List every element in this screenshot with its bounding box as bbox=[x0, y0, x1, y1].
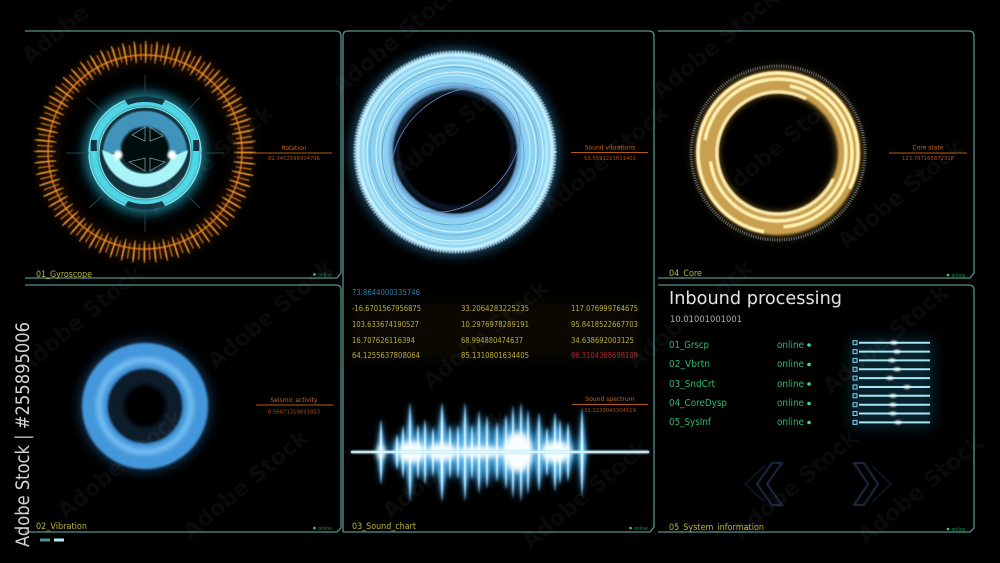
data table: 103.633674190527 bbox=[352, 320, 419, 329]
data table: 34.638692003125 bbox=[571, 336, 634, 345]
label: 03_Sound_chart: 03_Sound_chart bbox=[352, 522, 416, 532]
watermark: Adobe Stock bbox=[388, 65, 524, 185]
data table: -16.6701567956875 bbox=[352, 304, 421, 313]
status: online bbox=[313, 526, 332, 532]
watermark: Adobe Stock bbox=[378, 405, 514, 525]
callout: seismic activity: 0.56871319691853 bbox=[268, 410, 320, 416]
panel: vibration bbox=[36, 356, 333, 532]
data table: 64.1255637808064 bbox=[352, 351, 420, 360]
watermark: Adobe Stock bbox=[623, 255, 759, 375]
status list: online bbox=[777, 379, 804, 390]
watermark: Adobe Stock bbox=[538, 100, 674, 220]
icon: blue vibration ring bbox=[95, 356, 195, 456]
watermark: Adobe Stock bbox=[713, 85, 849, 205]
status list: 03_SndCrt bbox=[669, 379, 715, 390]
callout: sound spectrum: Sound spectrum bbox=[585, 396, 635, 403]
panel: gyroscope bbox=[36, 52, 332, 280]
callout: rotation bbox=[255, 145, 332, 162]
panel: system information bbox=[669, 288, 966, 533]
status: online: online bbox=[952, 527, 966, 533]
status: online bbox=[947, 273, 966, 279]
status: online bbox=[313, 272, 332, 278]
icon: sound vibration ring bbox=[355, 52, 555, 252]
data table: 16.707626116394 bbox=[352, 336, 415, 345]
data table: 96.3104368698109 bbox=[571, 351, 638, 360]
callout: rotation: 82.3402598924796 bbox=[268, 156, 320, 162]
watermark: Adobe Stock bbox=[518, 435, 654, 555]
callout: seismic activity bbox=[256, 397, 333, 416]
callout: rotation: Rotation bbox=[281, 145, 307, 152]
callout: sound vibrations: 59.5591223611401 bbox=[584, 156, 636, 162]
callout: sound vibrations bbox=[571, 144, 648, 162]
watermark: Adobe Stock bbox=[833, 135, 969, 255]
watermark: Adobe Stock bbox=[728, 425, 864, 545]
indicator tabs bbox=[40, 538, 64, 542]
label: 02_Vibration: 02_Vibration bbox=[36, 522, 87, 532]
data table: 73.8644000335746 bbox=[352, 288, 420, 297]
status: online bbox=[629, 526, 648, 532]
status list: 02_Vbrtn bbox=[669, 359, 710, 370]
slider stack bbox=[850, 338, 934, 428]
label: 05_System_information: 05_System_information bbox=[669, 523, 764, 533]
callout: core state: 123.787165872318 bbox=[902, 156, 954, 162]
chart: sound waveform bbox=[351, 402, 649, 502]
watermark: Adobe Stock bbox=[143, 100, 279, 220]
status list: online bbox=[777, 359, 804, 370]
icon: yellow core rings bbox=[685, 60, 871, 246]
status list: online bbox=[777, 340, 804, 351]
status list: 04_CoreDysp bbox=[669, 398, 727, 409]
callout: core state bbox=[889, 144, 967, 162]
status: online: online bbox=[952, 273, 966, 279]
callout: sound spectrum: 31.1239043304519 bbox=[584, 408, 636, 414]
status list: online bbox=[777, 417, 804, 428]
data table: 10.2976978289191 bbox=[461, 320, 529, 329]
icon: orange tick ring bbox=[45, 52, 245, 252]
panel: core bbox=[669, 60, 967, 279]
callout: sound spectrum bbox=[572, 396, 648, 414]
watermark: Adobe Stock bbox=[53, 405, 189, 525]
icon: right chevrons bbox=[854, 463, 891, 505]
label: 04_Core: 04_Core bbox=[669, 269, 702, 279]
data table: 68.994880474637 bbox=[461, 336, 523, 345]
panel: sound bbox=[350, 52, 649, 532]
status list: 01_Grscp bbox=[669, 340, 709, 351]
status: online: online bbox=[318, 526, 332, 532]
watermark: Adobe Stock bbox=[13, 260, 149, 380]
status list: online bbox=[777, 398, 804, 409]
stock id caption: Adobe Stock | #255895006 bbox=[13, 322, 34, 547]
callout: sound vibrations: Sound vibrations bbox=[585, 144, 635, 152]
data table: 117.076999764675 bbox=[571, 304, 638, 313]
subheading: 10.01001001001 bbox=[670, 315, 742, 325]
heading: Inbound processing bbox=[669, 288, 842, 309]
watermark: Adobe Stock bbox=[418, 275, 554, 395]
icon: cyan gyroscope core bbox=[66, 75, 224, 232]
watermark: Adobe Stock bbox=[178, 425, 314, 545]
callout: core state: Core state bbox=[912, 144, 944, 152]
data table bbox=[350, 288, 640, 360]
data table: 85.1310801634405 bbox=[461, 351, 529, 360]
status list: 05_SysInf bbox=[669, 417, 712, 428]
watermark: Adobe Stock bbox=[203, 255, 339, 375]
data table: 33.2064283225235 bbox=[461, 304, 529, 313]
watermark: Adobe Stock bbox=[853, 430, 989, 550]
watermark: Adobe Stock bbox=[818, 280, 954, 400]
status list bbox=[669, 340, 811, 428]
data table: 95.8418522667703 bbox=[571, 320, 638, 329]
watermark: Adobe bbox=[18, 0, 94, 70]
icon: left chevrons bbox=[745, 463, 782, 505]
callout: seismic activity: Seismic activity bbox=[270, 397, 318, 404]
status: online: online bbox=[318, 272, 332, 278]
status: online: online bbox=[634, 526, 648, 532]
label: 01_Gyroscope: 01_Gyroscope bbox=[36, 270, 92, 280]
status: online bbox=[947, 527, 966, 533]
